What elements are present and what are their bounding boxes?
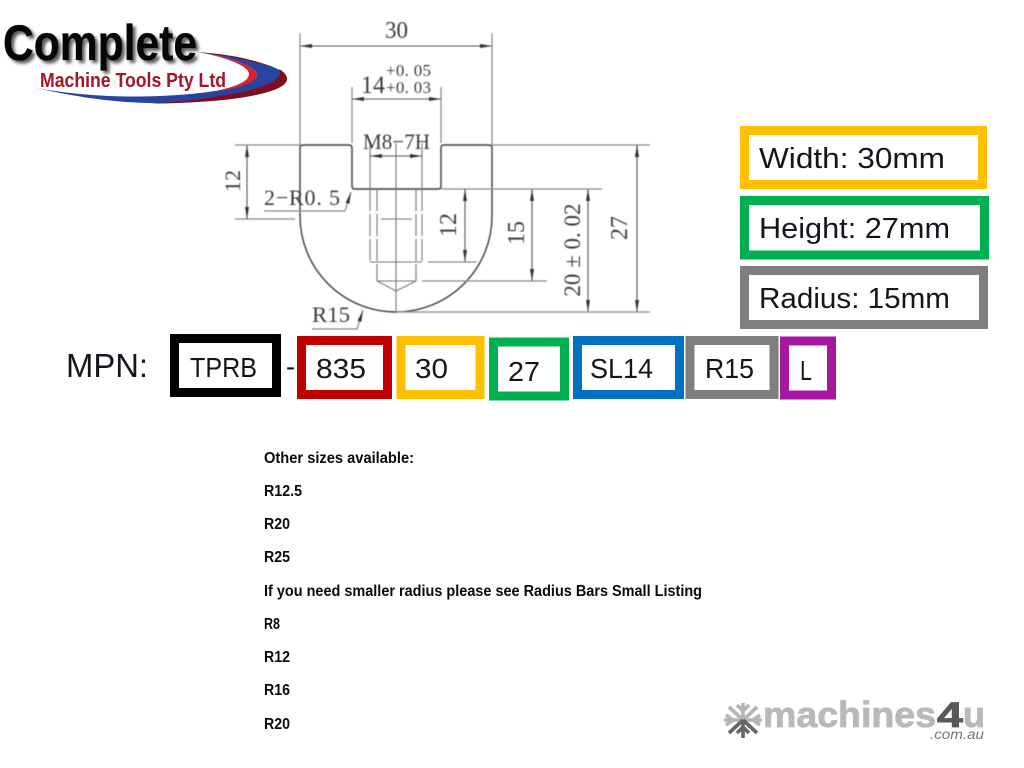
MPN part: SL14 [578, 340, 680, 394]
MPN part: L [784, 341, 832, 395]
MPN part: 30: 30 [415, 353, 448, 384]
MPN part: 835 [302, 340, 388, 394]
text block: other sizes available: R12 [264, 649, 290, 666]
spec box: height: Height: 27mm [759, 213, 950, 245]
spec box: radius [744, 270, 984, 324]
logo wordmark: Complete [3, 15, 197, 71]
MPN part: L: L [800, 355, 812, 386]
MPN part: 835: 835 [316, 353, 366, 384]
MPN part: R15: R15 [705, 353, 754, 384]
text block: other sizes available: R12.5 [264, 483, 302, 500]
MPN part: TPRB [174, 338, 276, 392]
logo wordmark: Complete [6, 18, 200, 74]
spec box: height [744, 200, 984, 255]
text block: other sizes available: Other sizes available: [264, 450, 414, 467]
text block: other sizes available [264, 450, 702, 733]
dimension labels: 12 [436, 213, 462, 237]
dimension labels: R15 [312, 302, 350, 327]
logo subtitle: Machine Tools Pty Ltd [40, 70, 226, 92]
text block: other sizes available: R20 [264, 716, 290, 733]
dimension labels: +0. 05 [386, 61, 431, 80]
MPN part: SL14: SL14 [590, 353, 653, 384]
text block: other sizes available: R16 [264, 682, 290, 699]
.com.au suffix: .com.au [930, 726, 984, 742]
spec box: radius: Radius: 15mm [759, 283, 950, 315]
text block: other sizes available: R8 [264, 616, 280, 633]
watermark: machines4u.com.au [724, 694, 985, 742]
technical drawing: radius bar profile [220, 18, 650, 329]
dimension labels: 2−R0. 5 [264, 185, 340, 210]
dimension labels: 14 [361, 72, 385, 99]
MPN part: R15 [690, 340, 774, 394]
dimension labels: M8−7H [363, 129, 430, 154]
dimension labels: 12 [220, 170, 245, 192]
logo: Complete Machine Tools [3, 15, 287, 104]
text block: other sizes available: R25 [264, 549, 290, 566]
dimension labels: 30 [385, 18, 408, 44]
MPN part: 27: 27 [508, 356, 540, 387]
machines4u wordmark: 4 [937, 696, 964, 735]
dimension labels: +0. 03 [386, 78, 431, 97]
MPN part: TPRB: TPRB [190, 352, 257, 383]
MPN label: MPN: [66, 347, 148, 384]
dimension labels: 15 [504, 221, 530, 245]
text block: other sizes available: R20 [264, 516, 290, 533]
dimension labels: 20 ± 0. 02 [560, 203, 585, 297]
threaded hole [370, 143, 422, 312]
machines4u wordmark: machines [763, 694, 936, 735]
logo swoosh [36, 52, 287, 104]
text block: other sizes available: If you need smaller radius please see Radius Bars Small Listing [264, 583, 702, 600]
separator dash: - [286, 351, 295, 382]
bar profile outline [300, 145, 492, 312]
dimension lines [247, 46, 637, 312]
spec box: width: Width: 30mm [759, 143, 945, 175]
MPN part: 30 [401, 340, 480, 394]
MPN part: 27 [494, 342, 564, 396]
spec box: width [744, 130, 982, 184]
dimension labels [220, 18, 633, 327]
extension lines [235, 33, 650, 329]
dimension labels: 27 [607, 216, 633, 240]
icon: snowflake star [724, 703, 762, 738]
machines4u wordmark: u [963, 694, 985, 735]
